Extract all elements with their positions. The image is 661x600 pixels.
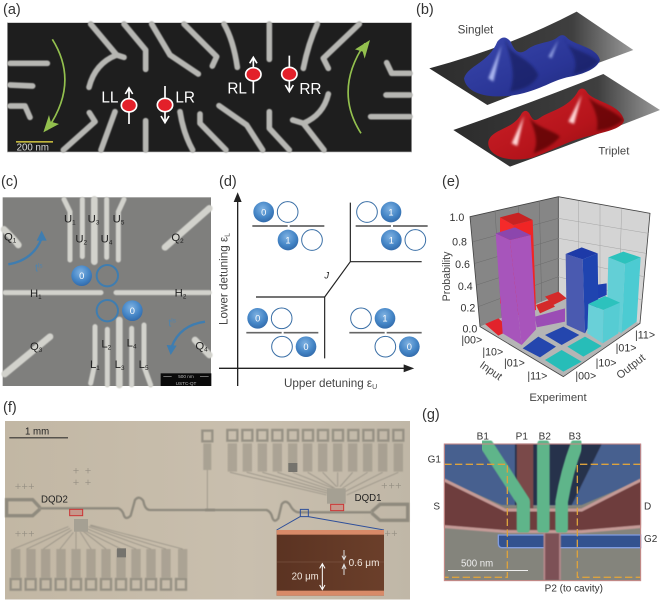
gate labels: 5 <box>121 220 125 227</box>
gate labels <box>4 214 208 372</box>
spin RL <box>246 57 261 93</box>
triplet surface <box>453 74 660 167</box>
gate labels: P1 <box>516 431 528 442</box>
y tick labels: 0.8 <box>452 237 467 249</box>
blue arrow bottom-right <box>167 318 205 355</box>
state 00/10 top-left <box>252 202 324 250</box>
panel label: (a): (a) <box>3 2 21 18</box>
gate labels: G2 <box>644 534 658 545</box>
panel border <box>444 444 641 581</box>
marker crosses <box>15 468 91 536</box>
gate labels: 1 <box>96 365 100 372</box>
output title: Output <box>614 352 648 382</box>
gate labels: L <box>101 338 108 350</box>
y tick labels: 0.4 <box>458 281 473 293</box>
green arrow right <box>348 40 370 133</box>
gate labels: 2 <box>180 238 184 245</box>
DQD2 label: DQD2 <box>41 494 68 505</box>
red box DQD2 <box>70 509 83 516</box>
experiment title: Experiment <box>529 392 587 404</box>
axes <box>219 194 412 386</box>
gate labels: L <box>90 359 96 371</box>
blue arrow bottom-right: t <box>168 318 171 330</box>
panel: (g) false-colored SEM <box>428 431 658 594</box>
small blue bar <box>595 283 607 300</box>
y tick labels: 0.2 <box>461 303 475 315</box>
gate labels: Q <box>4 232 13 244</box>
dot labels: RL <box>227 81 247 98</box>
gate labels: Q <box>195 340 204 352</box>
panel label: (g): (g) <box>422 407 440 423</box>
dot labels <box>101 81 321 107</box>
left side of device <box>7 426 215 590</box>
left comb <box>7 431 215 590</box>
gate labels: B2 <box>539 431 551 442</box>
input tick labels: |10> <box>482 346 503 358</box>
panel label: (e): (e) <box>442 174 460 190</box>
output tick labels: |00> <box>575 370 596 382</box>
output tick labels <box>575 329 655 382</box>
qubit circles: 0 <box>79 271 84 281</box>
gates <box>4 199 209 385</box>
x axis label: U <box>372 384 377 391</box>
gate labels: U <box>64 214 72 226</box>
chart walls and floor <box>470 197 650 377</box>
scale bar 1 mm: 1 mm <box>25 426 49 437</box>
gate labels: 4 <box>204 346 208 353</box>
blue background region <box>444 444 641 505</box>
state 10 bottom-right <box>349 308 422 357</box>
purple bars <box>496 227 565 345</box>
charge transition lines <box>256 203 422 358</box>
state 00/10 top-left: 0 <box>261 207 266 217</box>
y axis label: L <box>224 233 231 237</box>
orange dashed boxes <box>444 464 641 577</box>
left launch <box>7 500 40 516</box>
gate labels: 1 <box>13 238 17 245</box>
panel: (f) optical micrograph of chip <box>5 421 410 600</box>
input tick labels: |11> <box>527 370 547 382</box>
state 00/10 top-left: 1 <box>285 235 291 245</box>
gate labels: Q <box>30 341 39 353</box>
state 11 top-right: 1 <box>389 235 394 245</box>
panel: (b) singlet and triplet surfaces <box>429 12 660 167</box>
J label: J <box>323 270 329 280</box>
green arrow left <box>43 39 65 132</box>
state 10 bottom-right: 1 <box>382 314 388 324</box>
output tick labels: |11> <box>635 329 655 341</box>
blue arrow top-left <box>8 231 47 275</box>
y tick labels: 0.6 <box>455 259 470 271</box>
blue arrow bottom-right: ls <box>171 318 176 325</box>
gate labels: U <box>101 233 109 245</box>
right launch <box>372 504 408 520</box>
state 11 top-right <box>356 202 428 250</box>
right comb <box>205 430 408 521</box>
source and drain (pink-brown) <box>444 444 641 580</box>
inset CPW micrograph <box>277 530 384 596</box>
gate labels: H <box>175 287 183 299</box>
y tick labels: 0.0 <box>463 323 477 335</box>
x axis label: Upper detuning ε <box>284 377 372 390</box>
state 11 top-right: 1 <box>388 207 394 217</box>
scale bar box: USTC-QT <box>176 381 196 386</box>
panel: (e) 3D bar chart <box>441 197 655 404</box>
DQD1 label: DQD1 <box>355 493 382 504</box>
CPW resonator <box>205 502 372 521</box>
input title: Input <box>477 359 504 383</box>
qubit circles <box>71 265 143 321</box>
spin RR <box>282 56 297 92</box>
CPW resonator <box>40 498 215 518</box>
gate labels: U <box>88 214 96 226</box>
blue arrow top-left: ls <box>38 263 43 270</box>
blue bar <box>566 247 598 333</box>
gate labels: B1 <box>477 431 489 442</box>
y axis title: Probability <box>441 251 453 301</box>
gate labels: 2 <box>108 344 112 351</box>
panel: (a) SEM image of quadruple dot device <box>7 23 412 154</box>
red box DQD1 <box>331 504 344 511</box>
y axis label: Lower detuning ε <box>217 237 230 325</box>
red bar <box>500 213 536 317</box>
input tick labels: |01> <box>504 358 525 370</box>
scale bar: 200 nm <box>17 143 49 154</box>
gate labels: 2 <box>183 293 187 300</box>
panel label: (f): (f) <box>3 400 17 416</box>
gate labels: G1 <box>428 455 441 466</box>
gate labels: 2 <box>84 239 88 246</box>
singlet label: Singlet <box>458 23 494 36</box>
gate labels: L <box>115 359 121 371</box>
dot labels: RR <box>299 81 321 98</box>
output tick labels: |10> <box>596 358 617 370</box>
gate labels: Q <box>171 232 180 244</box>
dot labels: LL <box>101 90 119 107</box>
spin LR <box>157 86 173 123</box>
gate labels: B3 <box>569 431 581 442</box>
green barrier gates <box>487 445 577 528</box>
state 00 bottom-left: 0 <box>303 342 309 352</box>
gate labels: L <box>127 338 133 350</box>
marker crosses <box>382 483 401 536</box>
gate labels: 3 <box>121 365 125 372</box>
y tick labels <box>450 212 477 335</box>
panel label: (b): (b) <box>416 2 434 18</box>
gate labels: H <box>30 288 38 300</box>
gate labels: D <box>644 502 651 513</box>
output tick labels: |01> <box>616 343 637 355</box>
gate electrodes <box>10 24 410 150</box>
scale bar: 500 nm <box>461 558 493 569</box>
scale bar box: 500 nm <box>178 374 194 379</box>
gate labels: U <box>113 214 121 226</box>
inset CPW micrograph: 20 μm <box>292 572 319 583</box>
y tick labels: 1.0 <box>450 212 464 224</box>
gate labels <box>428 431 658 594</box>
inset CPW micrograph: 0.6 μm <box>349 558 379 569</box>
panel: (c) SEM image with qubit dots <box>3 197 211 386</box>
gate labels: 4 <box>109 239 113 246</box>
gate labels: 3 <box>96 220 100 227</box>
blue arrow top-left: t <box>35 263 38 275</box>
scale bar <box>448 558 528 571</box>
state 00 bottom-left <box>246 308 318 357</box>
gate labels: 3 <box>39 347 43 354</box>
input tick labels <box>461 334 547 382</box>
gate labels: U <box>75 233 84 245</box>
gate labels: P2 (to cavity) <box>545 583 603 594</box>
scale bar 1 mm <box>9 426 68 438</box>
triplet label: Triplet <box>598 145 630 157</box>
gate labels: 4 <box>133 344 137 351</box>
panel label: (c): (c) <box>1 174 18 190</box>
right side of device <box>205 430 408 596</box>
gate labels: S <box>433 502 440 513</box>
dot labels: LR <box>175 90 195 107</box>
state 00 bottom-left: 0 <box>255 314 260 324</box>
panel label: (d): (d) <box>219 174 237 190</box>
central gray pad <box>117 548 126 557</box>
gate labels: 1 <box>38 294 42 301</box>
panel: (d) stability diagram <box>217 194 428 391</box>
central gray pad <box>288 463 297 472</box>
G2 blue gate <box>498 535 641 548</box>
spin LL <box>121 88 137 124</box>
qubit circles: 0 <box>130 306 135 316</box>
teal bars <box>587 252 641 343</box>
singlet surface <box>429 12 633 105</box>
gate labels: 1 <box>72 220 76 227</box>
floor tiles <box>485 292 602 372</box>
state 10 bottom-right: 0 <box>407 342 412 352</box>
scale bar box <box>161 373 211 386</box>
zoom lines <box>277 509 384 530</box>
input tick labels: |00> <box>461 334 482 346</box>
gate labels: 5 <box>145 365 149 372</box>
gate labels: L <box>139 359 145 371</box>
